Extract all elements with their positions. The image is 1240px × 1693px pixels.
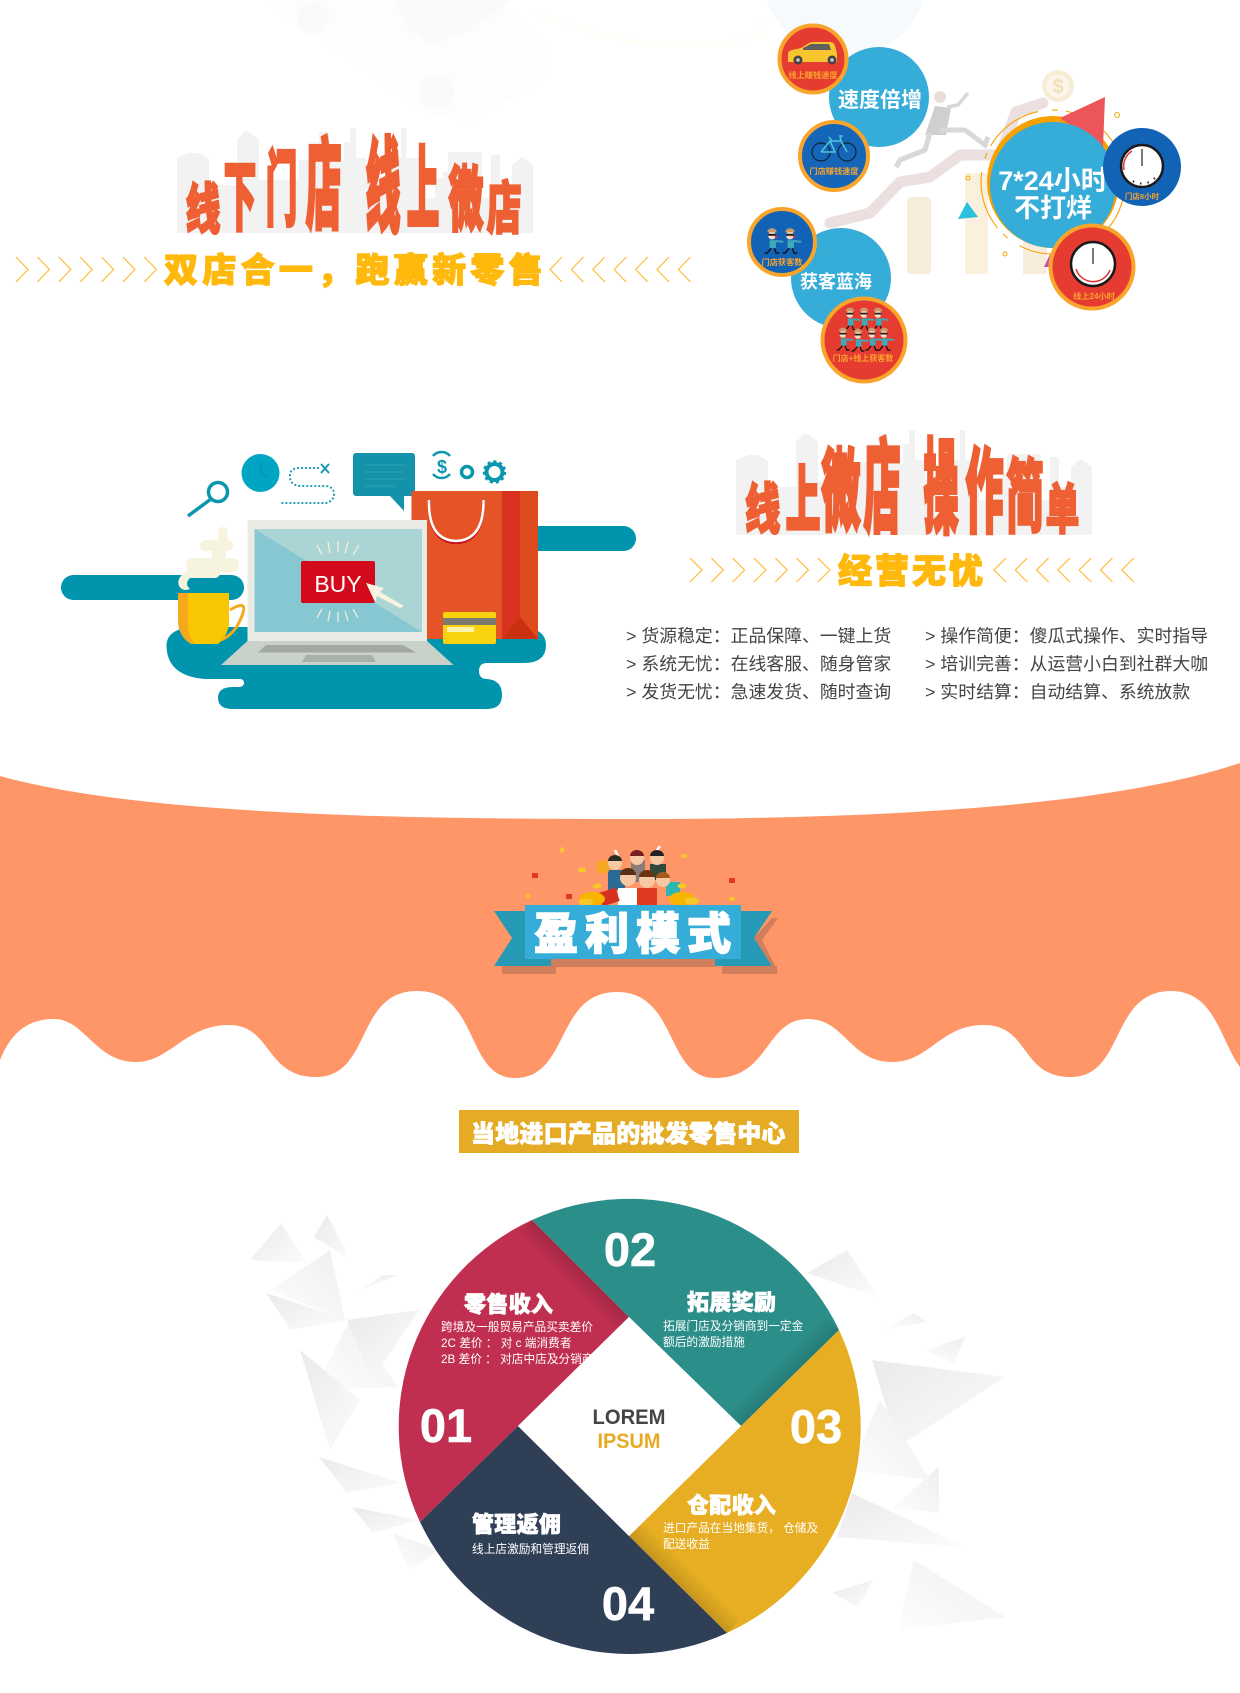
number 04: 04	[602, 1577, 654, 1630]
credit card	[443, 612, 496, 644]
clock badge: 门店8小时	[1103, 128, 1181, 206]
yellow heading box	[459, 1110, 799, 1153]
badge: store + online customers: 门店+线上获客数	[833, 353, 893, 363]
title: 线上微店 操作简单: 上	[786, 461, 820, 543]
badge group: 7*24小时 不打烊	[966, 97, 1125, 256]
badge: store + online customers	[822, 298, 906, 382]
center label: LOREM	[592, 1406, 666, 1429]
sector 01 red	[399, 1220, 629, 1522]
text: 仓配收入: 进口产品在当地集货， 仓储及	[663, 1521, 818, 1535]
title: 线下门店 线上微店: 线	[366, 132, 400, 246]
feature list left column: > 货源稳定：正品保障、一键上货	[626, 626, 891, 646]
dotted route	[281, 468, 334, 503]
text: 零售收入: 跨境及一般贸易产品买卖差价	[441, 1320, 593, 1334]
title: 线下门店 线上微店: 店	[306, 130, 341, 242]
speech bubble	[353, 453, 415, 511]
title: 线上微店 操作简单: 单	[1046, 479, 1079, 541]
text: 零售收入: 零售收入	[464, 1292, 553, 1317]
text: 管理返佣: 线上店激励和管理返佣	[472, 1542, 589, 1556]
title: 线下门店 线上微店: 上	[407, 141, 439, 241]
ribbon banner: 盈利模式: 式	[687, 910, 731, 959]
badge: store bicycle speed: 门店赚钱速度	[809, 166, 859, 176]
center label	[592, 1406, 666, 1453]
sector 04 navy	[420, 1426, 727, 1654]
laptop shopping illustration	[61, 452, 636, 709]
ribbon banner: 盈利模式: 模	[636, 910, 680, 959]
skyline behind second title	[736, 430, 1092, 535]
center label: IPSUM	[598, 1430, 660, 1453]
center diamond	[518, 1317, 741, 1536]
feature list left column: > 发货无忧：急速发货、随时查询	[626, 682, 891, 702]
sector edge shadows	[513, 1220, 839, 1633]
laptop screen	[248, 520, 427, 641]
feature list right column: > 操作简便：傻瓜式操作、实时指导	[925, 626, 1208, 646]
badge: online car speed	[780, 26, 846, 92]
faint globe background	[534, 0, 927, 57]
skyline behind first title	[177, 128, 533, 233]
title: 线上微店 操作简单: 店	[864, 432, 900, 546]
badge: store customers: 门店获客数	[762, 257, 803, 267]
orange wave band	[0, 763, 1240, 1078]
growth chart with runner: $	[1052, 76, 1064, 98]
low-poly background shards	[250, 1215, 1005, 1630]
title: 线下门店 线上微店: 门	[266, 144, 297, 237]
yellow heading box: 当地进口产品的批发零售中心	[471, 1120, 786, 1148]
number 01: 01	[420, 1399, 472, 1452]
cartoon crowd with coins	[526, 846, 735, 906]
title: 线上微店 操作简单: 作	[966, 441, 1003, 544]
title: 线上微店 操作简单	[745, 432, 1079, 547]
clock icon	[242, 454, 280, 492]
text: 零售收入: 2B 差价 ： 对店中店及分销商	[441, 1352, 594, 1366]
text: 仓配收入	[663, 1493, 818, 1551]
title: 线上微店 操作简单: 微	[821, 443, 861, 542]
ribbon banner: 盈利模式: 盈	[534, 910, 578, 959]
text: 拓展奖励: 额后的激励措施	[663, 1335, 745, 1349]
clock badge: 线上24小时: 线上24小时	[1073, 291, 1115, 301]
text: 零售收入: 2C 差价 ： 对 c 端消费者	[441, 1336, 572, 1350]
badge: online car speed: 线上赚钱速度	[788, 70, 838, 80]
customer bubble: 获客蓝海	[791, 228, 891, 328]
feature list left column	[626, 626, 891, 702]
ribbon banner: 盈利模式: 利	[585, 910, 629, 959]
circle diagram	[399, 1199, 861, 1654]
speed bubble: 速度倍增	[829, 47, 929, 147]
text: 管理返佣	[472, 1512, 589, 1556]
number 03: 03	[790, 1400, 842, 1453]
badge: store customers	[749, 209, 815, 275]
title: 线下门店 线上微店: 线	[186, 180, 220, 241]
title: 线上微店 操作简单: 操	[924, 433, 958, 547]
currency and gears: $	[437, 457, 447, 477]
title: 线下门店 线上微店: 微	[449, 161, 484, 240]
speed bubble: 速度倍增: 速度倍增	[838, 88, 922, 112]
subtitle: 双店合一，跑赢新零售 with chevrons: 双店合一，跑赢新零售	[164, 252, 547, 290]
title: 线下门店 线上微店: 店	[487, 178, 521, 242]
clock badge: 线上24小时	[1044, 226, 1134, 308]
badge: store bicycle speed	[800, 122, 868, 190]
growth chart with runner	[830, 70, 1074, 274]
cup	[221, 606, 244, 640]
clock badge: 门店8小时: 门店8小时	[1125, 191, 1160, 201]
text: 仓配收入: 配送收益	[663, 1537, 710, 1551]
number 02: 02	[604, 1223, 656, 1276]
text: 拓展奖励: 拓展奖励	[687, 1290, 776, 1315]
sector 02 teal	[532, 1199, 839, 1426]
steam	[178, 527, 239, 590]
text: 仓配收入: 仓配收入	[687, 1493, 776, 1518]
laptop base	[221, 641, 454, 665]
ribbon banner: 盈利模式	[494, 905, 778, 974]
feature list left column: > 系统无忧：在线客服、随身管家	[626, 654, 891, 674]
buy button	[301, 561, 375, 603]
feature list right column	[925, 626, 1208, 702]
feature list right column: > 培训完善：从运营小白到社群大咖	[925, 654, 1208, 674]
feature list right column: > 实时结算：自动结算、系统放款	[925, 682, 1190, 702]
text: 拓展奖励: 拓展门店及分销商到一定金	[663, 1319, 804, 1333]
shopping bag	[412, 491, 538, 639]
badge group: 7*24小时 不打烊: 7*24小时	[998, 166, 1108, 196]
title: 线上微店 操作简单: 线	[745, 480, 780, 541]
title: 线下门店 线上微店	[186, 130, 521, 246]
title: 线上微店 操作简单: 简	[1006, 454, 1044, 544]
badge group: 7*24小时 不打烊: 不打烊	[1014, 193, 1092, 223]
title: 线下门店 线上微店: 下	[224, 156, 256, 241]
text: 零售收入	[441, 1292, 594, 1366]
customer bubble: 获客蓝海: 获客蓝海	[800, 271, 872, 292]
text: 管理返佣: 管理返佣	[472, 1512, 561, 1537]
magnifier	[208, 482, 228, 502]
subtitle: 经营无忧 with chevrons: 经营无忧	[838, 553, 986, 591]
sector 03 yellow	[629, 1330, 861, 1633]
faint car background	[264, 0, 551, 123]
laptop shopping illustration: BUY	[314, 571, 362, 597]
text: 拓展奖励	[663, 1290, 804, 1349]
subtitle: 双店合一，跑赢新零售 with chevrons	[16, 252, 690, 290]
subtitle: 经营无忧 with chevrons	[690, 553, 1134, 591]
